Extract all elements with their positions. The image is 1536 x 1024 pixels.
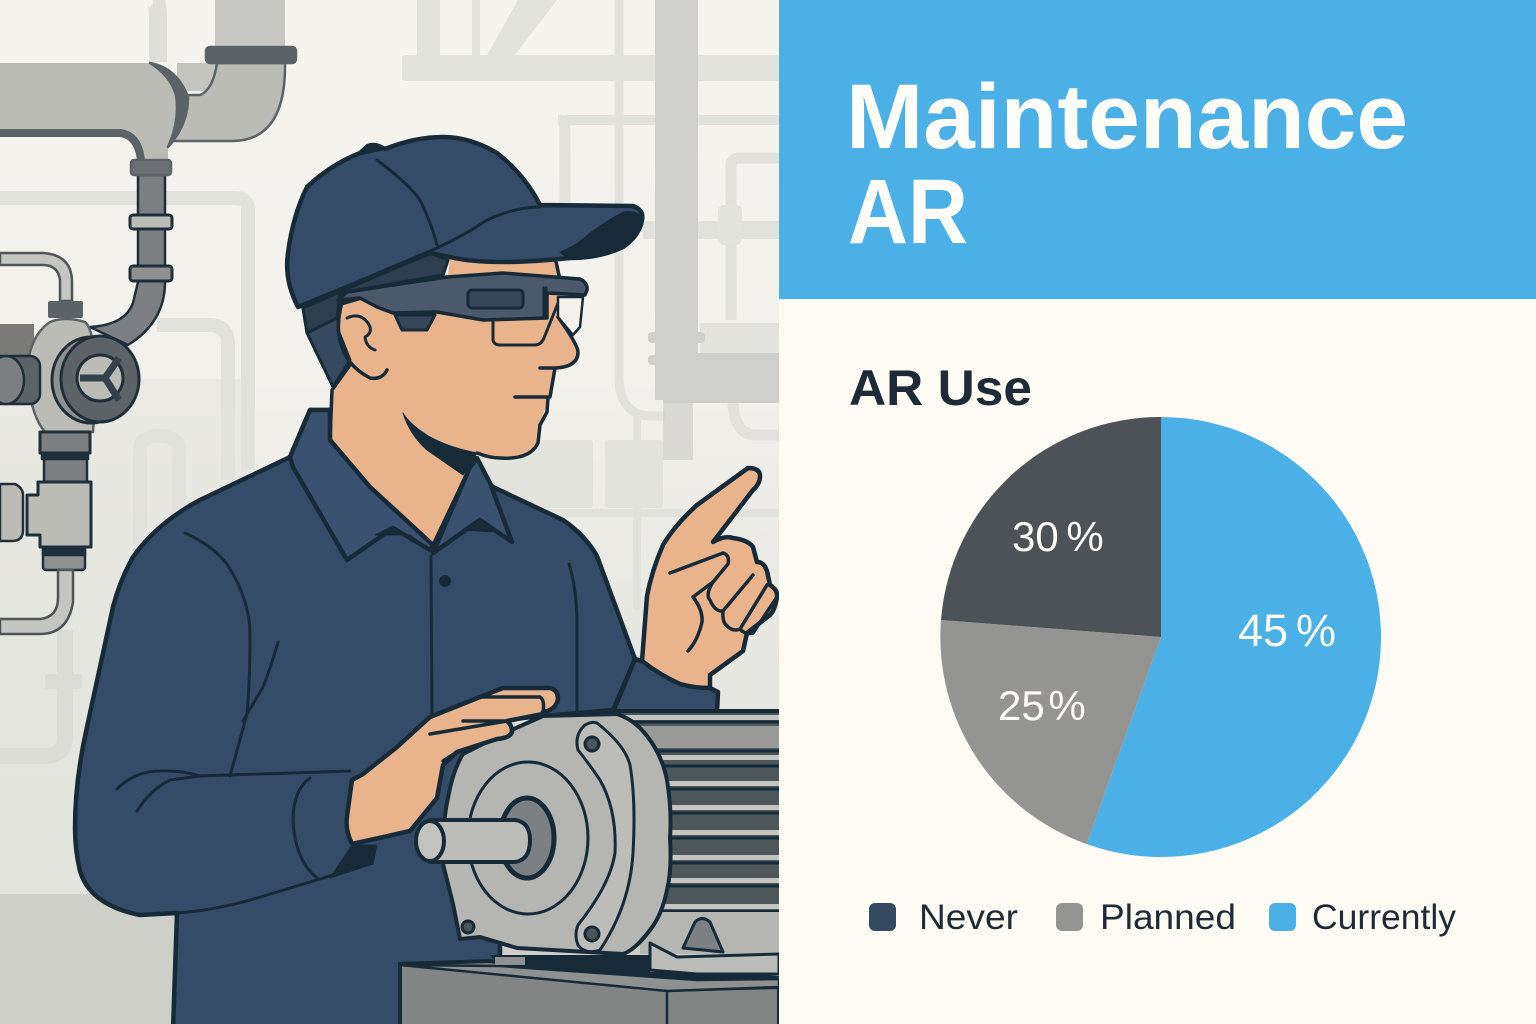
label 25%: 25 % bbox=[998, 682, 1086, 729]
bolts bbox=[462, 737, 599, 941]
crescent bracket bbox=[576, 722, 634, 952]
pipes and valve bbox=[0, 0, 296, 634]
side pipes bbox=[0, 253, 72, 301]
shirt bbox=[75, 410, 635, 1024]
hair bbox=[303, 253, 448, 387]
cap bbox=[287, 137, 642, 307]
face ring bbox=[468, 762, 588, 914]
legend bbox=[869, 898, 1457, 937]
slice: never 30% bbox=[941, 417, 1161, 637]
workshop background bbox=[0, 0, 779, 1024]
pointing hand bbox=[642, 468, 777, 688]
shaft bbox=[416, 820, 530, 862]
pie chart bbox=[940, 417, 1381, 857]
valve side cap bbox=[0, 356, 40, 404]
motor bbox=[400, 711, 785, 1024]
neck and face bbox=[330, 257, 578, 545]
motor lower housing bbox=[640, 912, 785, 954]
foot bracket bbox=[683, 918, 723, 952]
chart heading: AR Use bbox=[849, 360, 1032, 416]
legend: never bbox=[869, 898, 1018, 937]
legend: planned: Planned bbox=[1100, 898, 1236, 937]
collar bbox=[290, 410, 512, 560]
label 30%: 30 % bbox=[1012, 513, 1104, 560]
legend: never: Never bbox=[919, 898, 1018, 937]
bore bbox=[500, 798, 554, 878]
slice: planned 25% bbox=[940, 620, 1161, 844]
base box bbox=[400, 955, 779, 1024]
end plate bbox=[443, 714, 671, 954]
title: Maintenance bbox=[846, 66, 1408, 168]
worker bbox=[75, 137, 777, 1024]
slice: currently 45% bbox=[1086, 417, 1381, 857]
arm cuff bbox=[613, 659, 718, 712]
cooling fins bbox=[615, 711, 785, 912]
valve body bbox=[27, 319, 95, 432]
title line 2: AR bbox=[848, 161, 968, 263]
panel: illustration bbox=[0, 0, 785, 1024]
handwheel bbox=[52, 336, 139, 423]
lower valve fittings bbox=[0, 432, 91, 634]
label 45%: 45 % bbox=[1238, 605, 1336, 656]
AR glasses bbox=[338, 273, 587, 345]
upper pipes bbox=[0, 0, 296, 160]
ear bbox=[338, 302, 387, 378]
resting hand bbox=[330, 688, 558, 878]
legend: currently: Currently bbox=[1312, 898, 1457, 937]
shirt button bbox=[439, 575, 451, 587]
panel: title banner bbox=[779, 0, 1536, 299]
mounting plate bbox=[650, 943, 779, 974]
vertical pipe with flanges bbox=[90, 160, 172, 345]
shirt creases bbox=[117, 533, 577, 913]
